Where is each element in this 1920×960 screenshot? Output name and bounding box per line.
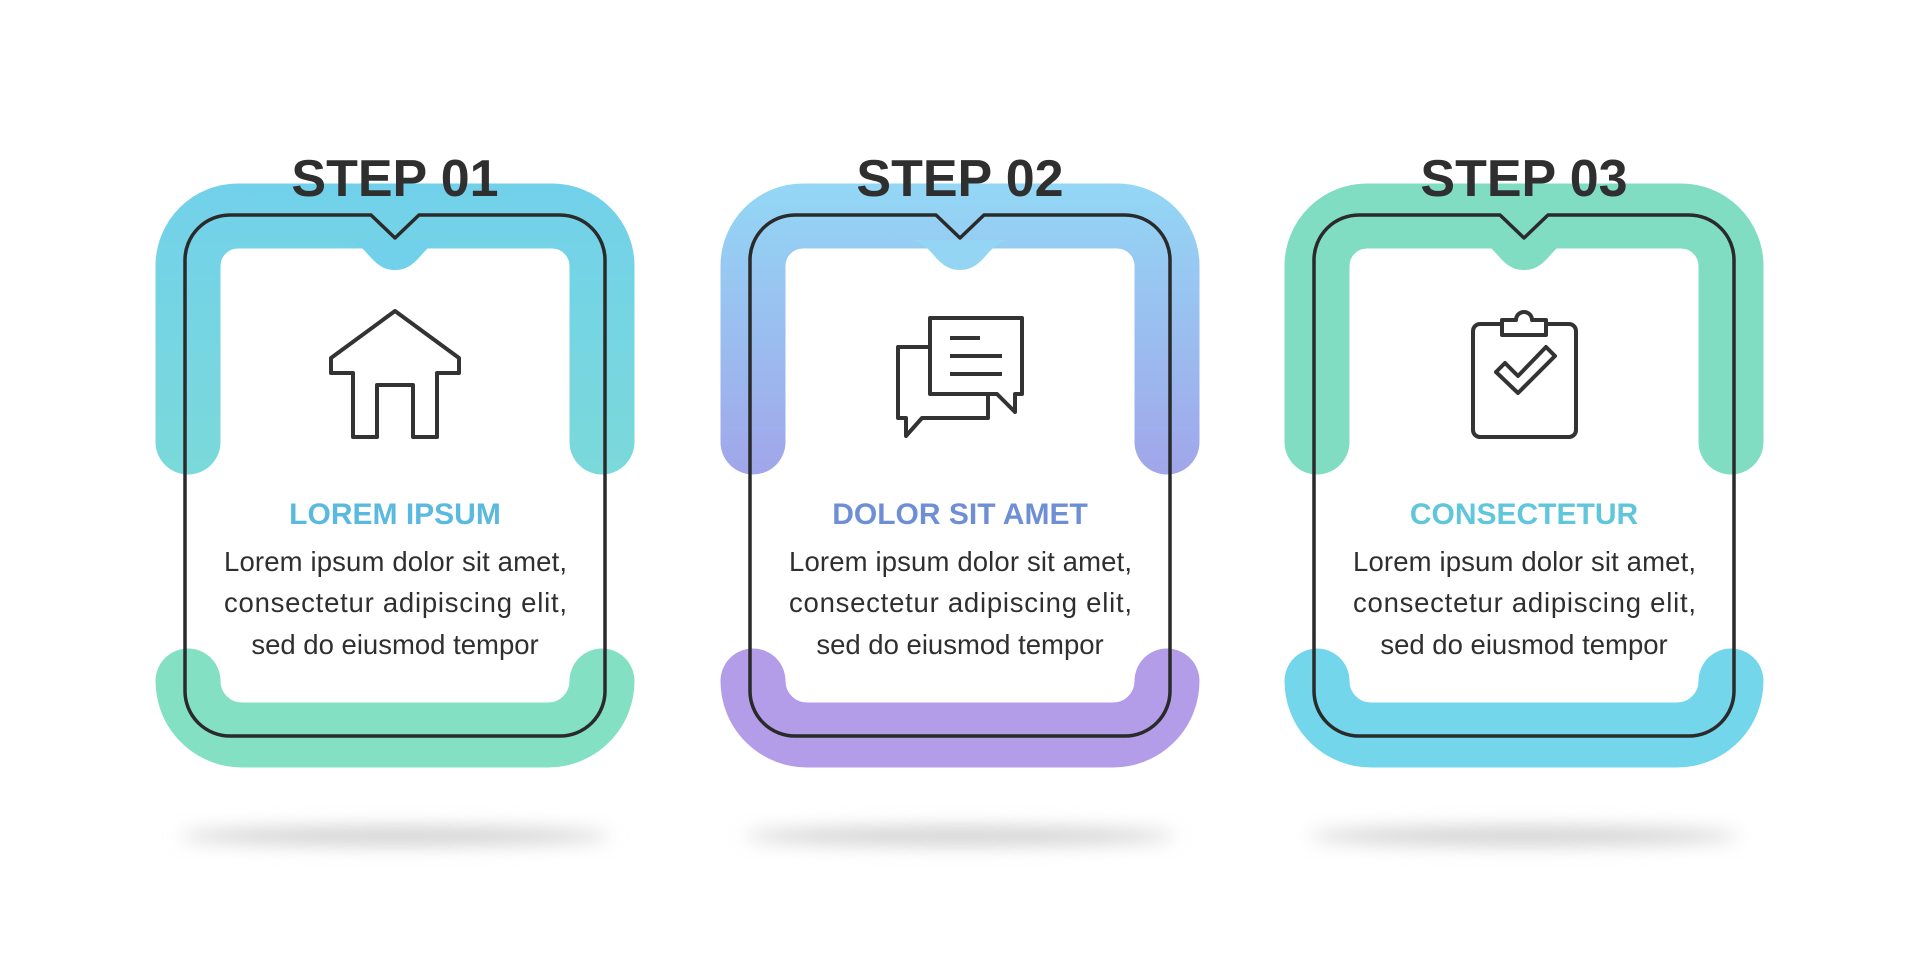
outline: [1314, 215, 1734, 736]
heading: STEP 03: [1420, 150, 1628, 208]
bottom band: [753, 681, 1167, 735]
body text: consectetur adipiscing elit,: [789, 587, 1132, 618]
body text: Lorem ipsum dolor sit amet,: [1353, 546, 1696, 577]
top band: [753, 216, 1167, 442]
top band: [1317, 216, 1731, 442]
body text: Lorem ipsum dolor sit amet,: [224, 546, 567, 577]
heading: STEP 02: [856, 150, 1064, 208]
body text: Lorem ipsum dolor sit amet,: [789, 546, 1132, 577]
bottom band: [188, 681, 602, 735]
body text: [1353, 546, 1696, 660]
title: DOLOR SIT AMET: [832, 498, 1088, 531]
top band: [188, 216, 602, 442]
shadow: [745, 827, 1175, 845]
outline: [185, 215, 605, 736]
heading: STEP 01: [291, 150, 499, 208]
body text: consectetur adipiscing elit,: [1353, 587, 1696, 618]
shadow: [180, 827, 610, 845]
bottom band: [1317, 681, 1731, 735]
card 1: [180, 150, 610, 845]
shadow: [1309, 827, 1739, 845]
icon: chat bubbles: [898, 318, 1022, 436]
icon: clipboard: [1473, 312, 1576, 437]
title: LOREM IPSUM: [289, 498, 501, 531]
body text: [224, 546, 567, 660]
body text: sed do eiusmod tempor: [1380, 629, 1668, 660]
card 3: [1309, 150, 1739, 845]
body text: sed do eiusmod tempor: [251, 629, 539, 660]
body text: [789, 546, 1132, 660]
title: CONSECTETUR: [1410, 498, 1639, 531]
body text: sed do eiusmod tempor: [816, 629, 1104, 660]
icon: house: [331, 311, 459, 437]
outline: [750, 215, 1170, 736]
card 2: [745, 150, 1175, 845]
body text: consectetur adipiscing elit,: [224, 587, 567, 618]
